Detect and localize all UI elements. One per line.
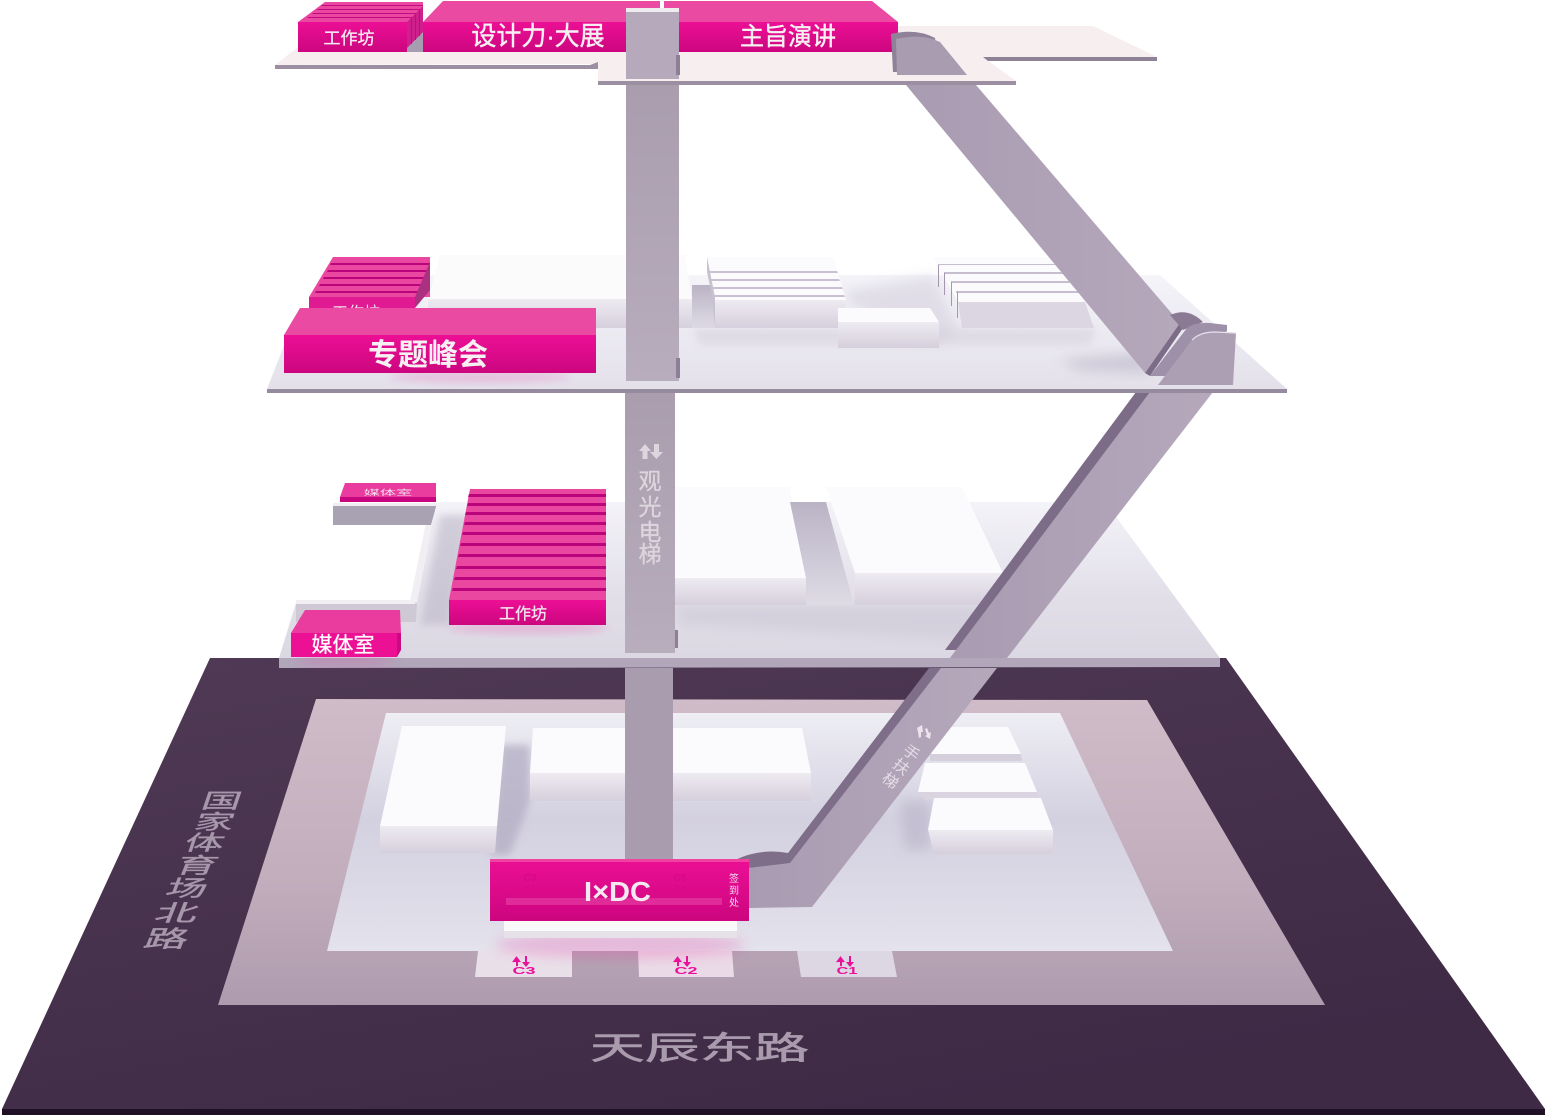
escalator label: 扶 [889, 755, 913, 779]
road label: north road: 育 [172, 853, 222, 878]
road label: north road: 场 [162, 877, 212, 901]
workshop block level 3 [309, 257, 430, 322]
entrance C1 [797, 951, 897, 977]
escalator: level 3 to level 4 [891, 32, 1236, 385]
media room lower [291, 610, 401, 665]
registration desk: IxDC [490, 859, 749, 958]
road label: east road: 天辰东路 [590, 1030, 809, 1066]
escalator label [878, 741, 923, 793]
entrance C2 [638, 951, 734, 977]
ground floor plate [327, 713, 1173, 977]
entrance C1: C1 [836, 966, 858, 977]
road label: north road: 家 [191, 810, 238, 834]
workshop block level 3: 工作坊 [332, 304, 380, 322]
level 3 room: large [428, 255, 692, 328]
logo: I×DC [584, 876, 651, 907]
escalator head: level 4 [891, 32, 939, 72]
escalator head: level 3 back [1170, 312, 1203, 330]
keynote label: 主旨演讲 [740, 22, 836, 51]
road label: north road: 体 [181, 831, 228, 855]
level 2 room: right [826, 487, 1003, 605]
escalator arrows [917, 725, 931, 739]
level 3 rooms: stack right [933, 257, 1094, 328]
escalator: ground to level 2 [735, 668, 997, 908]
road label: north road: 国 [198, 789, 245, 813]
elevator label: 梯 [638, 541, 662, 567]
desk counter [504, 921, 737, 931]
faded signage reflection: ↓↑ [524, 881, 536, 895]
level 3 rooms: stack centre [707, 257, 846, 328]
faded signage reflection: C3 [524, 873, 537, 884]
level 4 plate [275, 1, 1157, 85]
road label: north road [140, 789, 245, 952]
elevator label: 观 [638, 468, 662, 494]
faded signage reflection: C5 [674, 873, 687, 884]
registration label: 到 [729, 885, 739, 897]
media room lower: 媒体室 [312, 634, 374, 657]
level 3 plate [267, 255, 1287, 393]
road label: north road: 北 [151, 901, 203, 926]
workshop block level 2: 工作坊 [499, 605, 547, 623]
faded signage reflection [524, 873, 687, 895]
ground floor rooms: right stack [918, 727, 1053, 854]
media room upper [340, 483, 436, 502]
registration label [729, 872, 739, 909]
elevator label [638, 468, 662, 567]
ground: dark road base [2, 658, 1545, 1115]
media room upper: 媒体室 [364, 488, 412, 497]
elevator column: level 2 section [625, 392, 678, 653]
entrance C3: C3 [512, 966, 536, 977]
elevator label: 电 [638, 519, 662, 545]
elevator column: ground section [625, 668, 673, 860]
escalator label: 梯 [878, 769, 902, 793]
ground floor room: centre [530, 728, 811, 801]
summit block [284, 308, 596, 383]
registration label: 处 [729, 897, 739, 909]
entrance C3 [475, 951, 572, 977]
entrance C2: C2 [674, 966, 698, 977]
faded signage reflection: ↓↑ [674, 881, 686, 895]
level 2 plate [279, 483, 1220, 668]
main exhibition block [423, 1, 898, 52]
elevator column: top section [626, 8, 680, 79]
workshop block level 2 [448, 489, 608, 634]
escalator: level 2 to level 3 [945, 392, 1213, 658]
summit block: 专题峰会 [368, 339, 488, 372]
escalator head: level 3 front [1158, 332, 1236, 385]
ground floor room: left [380, 726, 506, 853]
workshop block level 4 [298, 2, 423, 52]
elevator column: level 3 section [626, 85, 680, 381]
escalator label: 手 [899, 741, 923, 765]
exhibition label: 设计力·大展 [471, 21, 605, 51]
road label: north road: 路 [140, 926, 194, 952]
level 3 room: small [838, 308, 939, 348]
level 2 raised walkway [296, 503, 437, 622]
registration label: 签 [729, 872, 739, 885]
ground plaza [218, 699, 1325, 1005]
elevator arrows [639, 444, 663, 459]
level 2 room: centre [672, 487, 853, 605]
elevator label: 光 [638, 494, 662, 520]
workshop block level 4: 工作坊 [324, 29, 374, 48]
